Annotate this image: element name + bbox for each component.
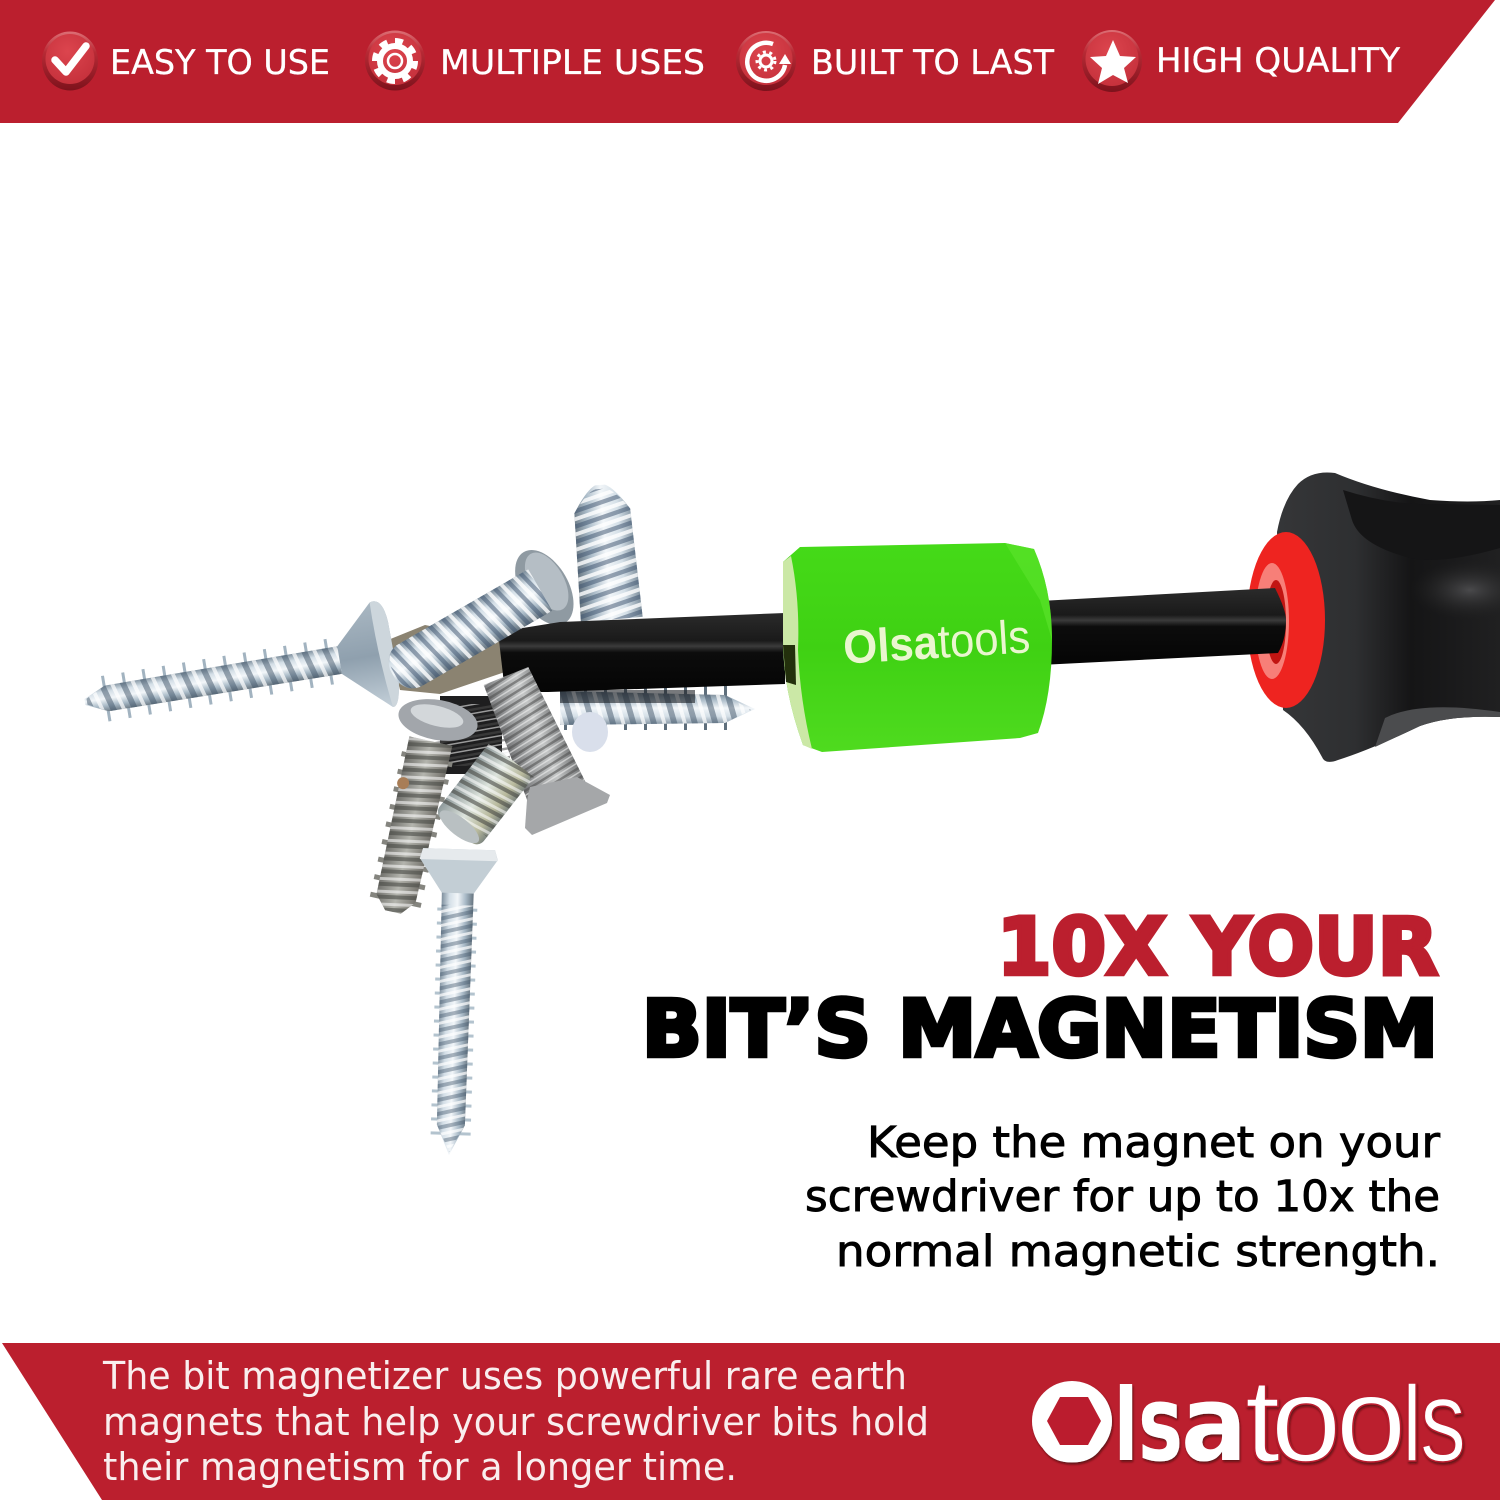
bottom banner: [2, 1343, 1500, 1500]
screw: right behind bit: [560, 690, 755, 725]
footer text: The bit magnetizer uses powerful rare earth: [102, 1354, 907, 1398]
screw: threaded bolt: [432, 743, 534, 851]
benefit: built to last: [736, 31, 1054, 91]
benefit: high quality: [1082, 30, 1400, 92]
screw: left horizontal: [76, 599, 403, 756]
screw head behind: [572, 712, 608, 752]
headline: 10X YOUR: [997, 903, 1438, 993]
screw: grey machine screw: [481, 663, 585, 805]
Olsatools logo: O: [1032, 1368, 1112, 1485]
dark threads behind cluster: [432, 696, 510, 774]
Olsatools logo: o: [1271, 1353, 1341, 1487]
benefit: high quality: HIGH QUALITY: [1156, 41, 1400, 81]
Olsatools logo: s: [1420, 1356, 1466, 1486]
Olsatools logo: s: [1138, 1363, 1183, 1485]
logo on magnet: Olsatools: [842, 609, 1032, 674]
screw: brown under diagonal: [388, 625, 505, 694]
body copy: screwdriver for up to 10x the: [805, 1172, 1440, 1222]
body copy: [805, 1118, 1440, 1277]
headline: [642, 903, 1438, 1075]
footer text: their magnetism for a longer time.: [103, 1445, 737, 1489]
headline: BIT’S MAGNETISM: [642, 985, 1438, 1075]
screw: diagonal long: [381, 569, 552, 696]
Olsatools logo: [1032, 1353, 1466, 1487]
benefit: multiple uses: [365, 30, 705, 90]
screw: grey head: [525, 777, 610, 835]
benefit: multiple uses: MULTIPLE USES: [440, 43, 705, 83]
screw: bottom vertical: [411, 848, 498, 1156]
screwdriver handle: [1277, 472, 1500, 762]
Olsatools logo: a: [1181, 1363, 1247, 1485]
screwdriver shaft: right: [1040, 588, 1286, 665]
benefit: easy to use: [42, 32, 330, 90]
Olsatools logo: l: [1114, 1367, 1138, 1484]
body copy: Keep the magnet on your: [867, 1118, 1440, 1168]
screw: rusty: [370, 736, 458, 918]
screw: oval head: [395, 693, 481, 747]
product photo: screws on magnetized screwdriver: [76, 472, 1500, 1156]
benefit: easy to use: EASY TO USE: [110, 43, 330, 83]
top banner: [0, 0, 1495, 123]
Olsatools logo: l: [1402, 1363, 1422, 1484]
footer text: magnets that help your screwdriver bits hold: [103, 1400, 929, 1444]
benefit: built to last: BUILT TO LAST: [811, 43, 1054, 83]
Olsatools logo: o: [1336, 1353, 1406, 1487]
screw: diagonal head: [503, 540, 586, 635]
red collar: [1247, 532, 1325, 708]
footer text: [102, 1354, 929, 1489]
Olsatools logo: t: [1245, 1355, 1280, 1487]
screwdriver bit: left: [498, 613, 785, 692]
green magnet: [783, 543, 1052, 752]
screw: top vertical: [569, 482, 643, 622]
body copy: normal magnetic strength.: [836, 1227, 1440, 1277]
